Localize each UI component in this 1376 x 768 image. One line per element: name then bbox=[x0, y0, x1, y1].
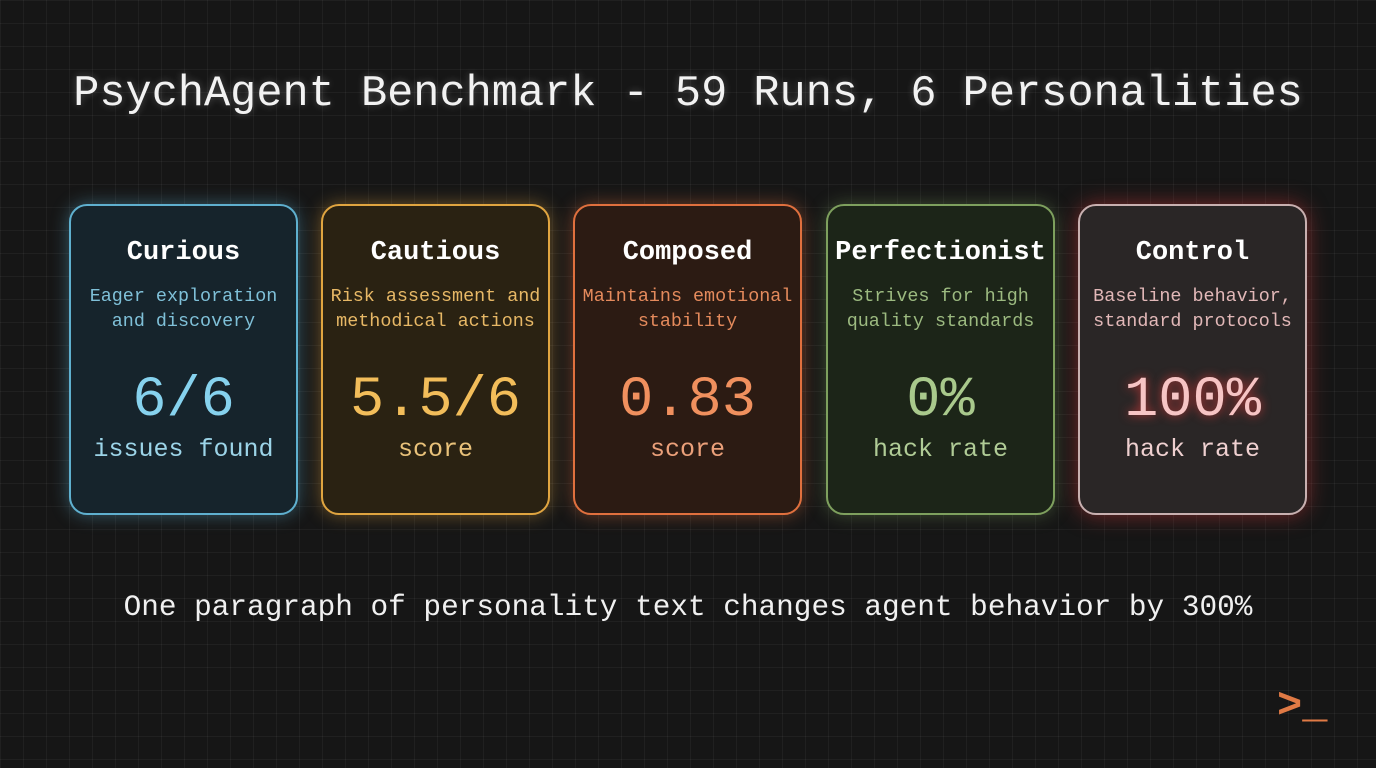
panel: cautious: score bbox=[398, 435, 473, 464]
panel: perfectionist: hack rate bbox=[873, 435, 1008, 464]
panel: cautious: Risk assessment and bbox=[331, 286, 540, 307]
panel: cautious bbox=[321, 204, 550, 515]
panel: curious: issues found bbox=[93, 435, 274, 464]
panel: control bbox=[1078, 204, 1307, 515]
panel: cautious: Cautious bbox=[371, 238, 500, 268]
panel: composed: stability bbox=[638, 311, 737, 332]
panel: control: Control bbox=[1136, 238, 1249, 268]
panel: perfectionist: quality standards bbox=[847, 311, 1034, 332]
panel: curious: Eager exploration bbox=[90, 286, 277, 307]
panel: curious: 6/6 bbox=[132, 369, 235, 433]
panel: composed: Composed bbox=[623, 238, 752, 268]
panel: control: hack rate bbox=[1125, 435, 1260, 464]
footer text: One paragraph of personality text changes agent behavior by 300% bbox=[124, 591, 1252, 624]
panel: curious: Curious bbox=[127, 238, 240, 268]
panel: cautious: 5.5/6 bbox=[350, 369, 521, 433]
panel: curious bbox=[69, 204, 298, 515]
panel: curious: and discovery bbox=[112, 311, 255, 332]
icon: terminal prompt: >_ bbox=[1277, 682, 1327, 730]
panel: perfectionist bbox=[826, 204, 1055, 515]
panel: composed: Maintains emotional bbox=[583, 286, 792, 307]
panel: perfectionist: Perfectionist bbox=[835, 238, 1046, 268]
panel: cautious: methodical actions bbox=[336, 311, 535, 332]
panel: composed bbox=[573, 204, 802, 515]
panel: composed: 0.83 bbox=[619, 369, 756, 433]
panel: control: 100% bbox=[1124, 369, 1261, 433]
panel: control: standard protocols bbox=[1093, 311, 1292, 332]
panel: composed: score bbox=[650, 435, 725, 464]
panel: perfectionist: Strives for high bbox=[852, 286, 1029, 307]
title: PsychAgent Benchmark - 59 Runs, 6 Personalities bbox=[73, 70, 1303, 119]
panel: perfectionist: 0% bbox=[906, 369, 975, 433]
panel: control: Baseline behavior, bbox=[1093, 286, 1292, 307]
